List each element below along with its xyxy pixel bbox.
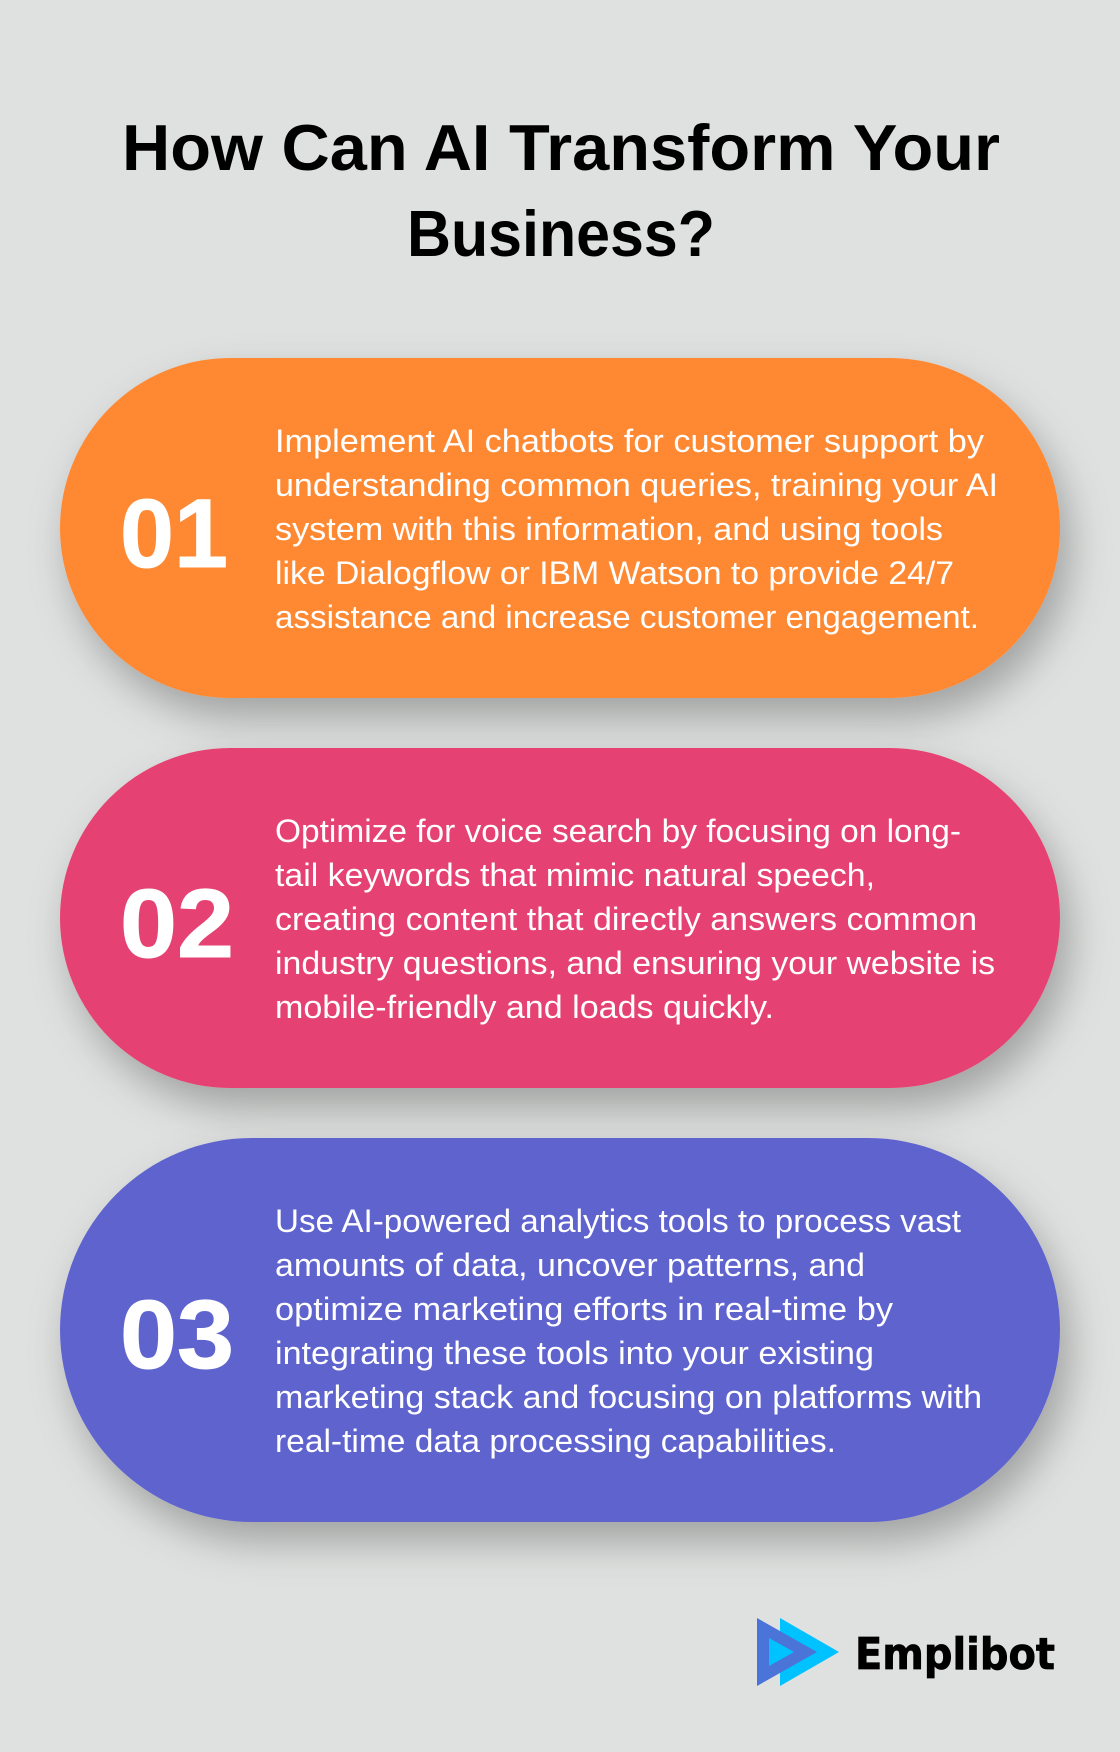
text block: step 03 description: amounts of data, uncover patterns, and: [275, 1247, 865, 1283]
text block: step 01 description: system with this information, and using tools: [275, 511, 943, 547]
text block: step 02 description: [275, 813, 995, 1025]
pill background: pink: [60, 748, 1060, 1088]
text block: step 01 description: [275, 423, 998, 635]
title: How Can AI Transform Your: [122, 111, 1000, 184]
panel: step 03: [60, 1138, 1060, 1522]
panel: step 01: [60, 358, 1060, 698]
text block: step 02 description: Optimize for voice search by focusing on long-: [275, 813, 961, 849]
text block: step 03 description: Use AI-powered analytics tools to process vast: [275, 1203, 961, 1239]
text block: step 01 description: assistance and increase customer engagement.: [275, 599, 979, 635]
text block: step 02 description: creating content that directly answers common: [275, 901, 977, 937]
text block: step 03 description: [275, 1203, 982, 1459]
text block: step 02 description: mobile-friendly and loads quickly.: [275, 989, 774, 1025]
number 02: 02: [120, 869, 234, 978]
icon: double play triangles: [757, 1618, 839, 1686]
text block: step 03 description: marketing stack and focusing on platforms with: [275, 1379, 982, 1415]
wordmark: Emplibot: [855, 1629, 1055, 1680]
pill background: orange: [60, 358, 1060, 698]
text block: step 03 description: integrating these tools into your existing: [275, 1335, 874, 1371]
title: [122, 111, 1000, 270]
text block: step 01 description: like Dialogflow or IBM Watson to provide 24/7: [275, 555, 954, 591]
title: Business?: [407, 197, 715, 270]
text block: step 01 description: Implement AI chatbots for customer support by: [275, 423, 985, 459]
number 03: 03: [120, 1280, 234, 1389]
pill background: purple: [60, 1138, 1060, 1522]
text block: step 02 description: tail keywords that mimic natural speech,: [275, 857, 875, 893]
text block: step 03 description: optimize marketing efforts in real-time by: [275, 1291, 894, 1327]
text block: step 01 description: understanding common queries, training your AI: [275, 467, 998, 503]
logo: Emplibot: [757, 1618, 1055, 1686]
text block: step 03 description: real-time data processing capabilities.: [275, 1423, 836, 1459]
panel: step 02: [60, 748, 1060, 1088]
number 01: 01: [120, 479, 228, 588]
text block: step 02 description: industry questions, and ensuring your website is: [275, 945, 995, 981]
